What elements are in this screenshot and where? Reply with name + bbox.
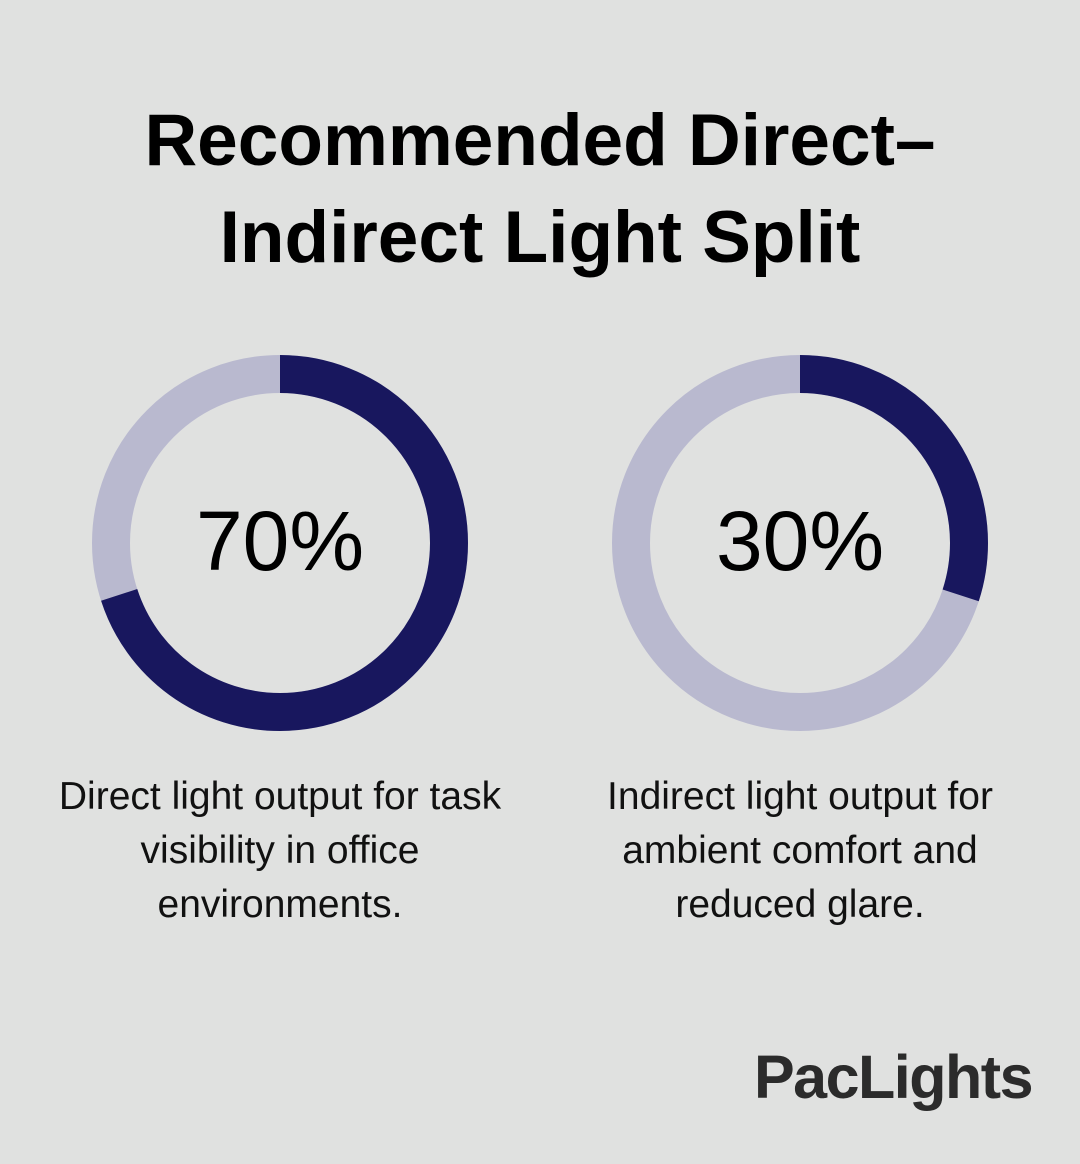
- logo: PacLights: [754, 1043, 1032, 1111]
- caption: indirect: Indirect light output for ambient comfort and reduced glare.: [607, 775, 993, 926]
- caption: direct: Direct light output for task visibility in office environments.: [59, 775, 501, 926]
- title: Recommended Direct–: [144, 100, 936, 181]
- title: Indirect Light Split: [220, 197, 860, 278]
- donut: 30 percent: [631, 374, 969, 712]
- donut: 70 percent: 70%: [196, 494, 364, 588]
- donut: 30 percent: 30%: [716, 494, 884, 588]
- donut: 70 percent: [111, 374, 449, 712]
- title: [144, 100, 936, 278]
